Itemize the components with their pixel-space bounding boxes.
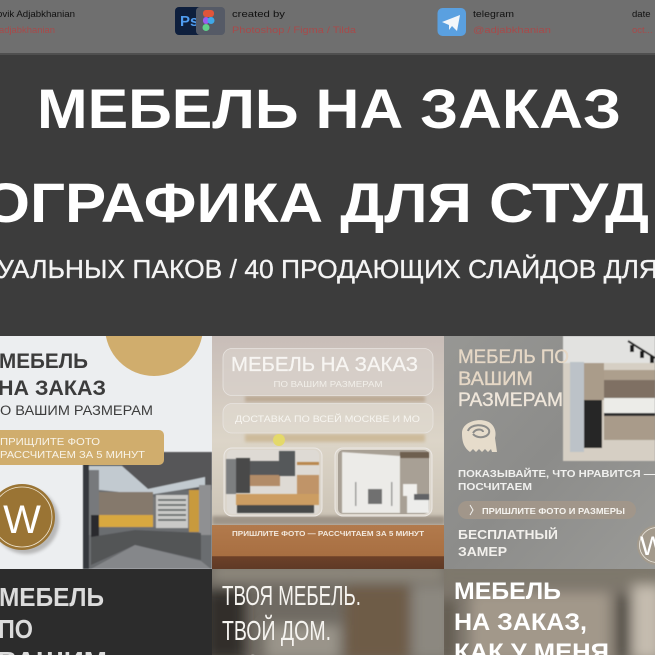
panel: concrete with kitchen [444, 336, 655, 569]
telegram handle: @adjabkhanian [473, 25, 551, 36]
free measurement: ЗАМЕР [458, 544, 507, 559]
heading: ТВОЯ МЕБЕЛЬ. [222, 580, 361, 611]
subheading: О ВАШИМ РАЗМЕРАМ [0, 403, 153, 418]
yellow light [273, 434, 285, 446]
heading [222, 586, 360, 655]
free measurement: БЕСПЛАТНЫЙ [458, 527, 558, 542]
heading: ВАШИМ [458, 368, 533, 390]
blurred room [444, 576, 655, 655]
glass card: heading: МЕБЕЛЬ НА ЗАКАЗ [231, 354, 418, 376]
heading: МЕБЕЛЬ [0, 582, 104, 612]
telegram label: telegram [473, 9, 514, 20]
logo badge: W [3, 498, 41, 542]
call to action: ПРИШЛИТЕ ФОТО — РАССЧИТАЕМ ЗА 5 МИНУТ [232, 529, 424, 538]
pill button [458, 501, 636, 519]
date value: oct... [632, 25, 653, 36]
tools label: created by [232, 9, 285, 20]
heading: РАЗМЕРАМ [458, 389, 563, 411]
gold call-to-action button: РАССЧИТАЕМ ЗА 5 МИНУТ [0, 450, 145, 461]
description: ПОКАЗЫВАЙТЕ, ЧТО НРАВИТСЯ — [458, 467, 655, 480]
description: ПОСЧИТАЕМ [458, 481, 532, 493]
gold call-to-action button [0, 430, 164, 465]
heading [454, 578, 609, 655]
description [458, 468, 655, 490]
icon: photoshop [175, 7, 205, 35]
heading: МЕБЕЛЬ [454, 578, 561, 605]
author handle: adjabkhanian [0, 25, 55, 36]
panel: blurred interior with condensed heading [212, 569, 444, 655]
header bar [0, 0, 655, 55]
gold call-to-action button: ПРИЩЛИТЕ ФОТО [0, 437, 100, 448]
blurred lights [212, 396, 445, 525]
wood tabletop [212, 525, 445, 569]
logo badge [0, 484, 59, 554]
heading: МЕБЕЛЬ ПО [458, 346, 569, 368]
icon: figma [196, 7, 225, 35]
date label: date [632, 9, 650, 20]
logo badge [637, 525, 655, 565]
glass card: delivery: ДОСТАВКА ПО ВСЕЙ МОСКВЕ И МО [235, 413, 420, 425]
glass card: delivery [223, 404, 433, 433]
heading: НА ЗАКАЗ, [454, 609, 587, 636]
title: МЕБЕЛЬ НА ЗАКАЗ [37, 77, 621, 140]
panel: white card with gold circle [0, 336, 212, 569]
panel: blurred room with white heading [440, 565, 655, 655]
wardrobe photo [335, 448, 432, 516]
panel: dark stone [0, 569, 212, 655]
icon: photoshop: Ps [180, 13, 198, 30]
glass card: heading [223, 348, 433, 396]
kitchen photo [224, 448, 322, 516]
pill button: ПРИШЛИТЕ ФОТО И РАЗМЕРЫ [482, 506, 625, 516]
gold circle [106, 336, 202, 376]
kitchen photo [83, 452, 212, 569]
heading line 2: НА ЗАКАЗ [0, 376, 106, 400]
icon: measuring tape [462, 420, 497, 452]
free measurement [458, 527, 557, 556]
panel: glass cards over interior [212, 336, 445, 569]
heading: ТВОЙ ДОМ. [222, 615, 331, 646]
icon: telegram [438, 8, 466, 36]
tagline: УАЛЬНЫХ ПАКОВ / 40 ПРОДАЮЩИХ СЛАЙДОВ ДЛЯ [0, 254, 655, 284]
glass card: heading: ПО ВАШИМ РАЗМЕРАМ [274, 380, 382, 389]
kitchen photo [563, 336, 655, 461]
blurred furniture [212, 569, 444, 655]
subtitle: ОГРАФИКА ДЛЯ СТУД [0, 171, 649, 234]
heading: МЕБЕЛЬ [0, 349, 88, 373]
heading [459, 349, 568, 406]
tools list: Photoshop / Figma / Tilda [232, 25, 357, 36]
